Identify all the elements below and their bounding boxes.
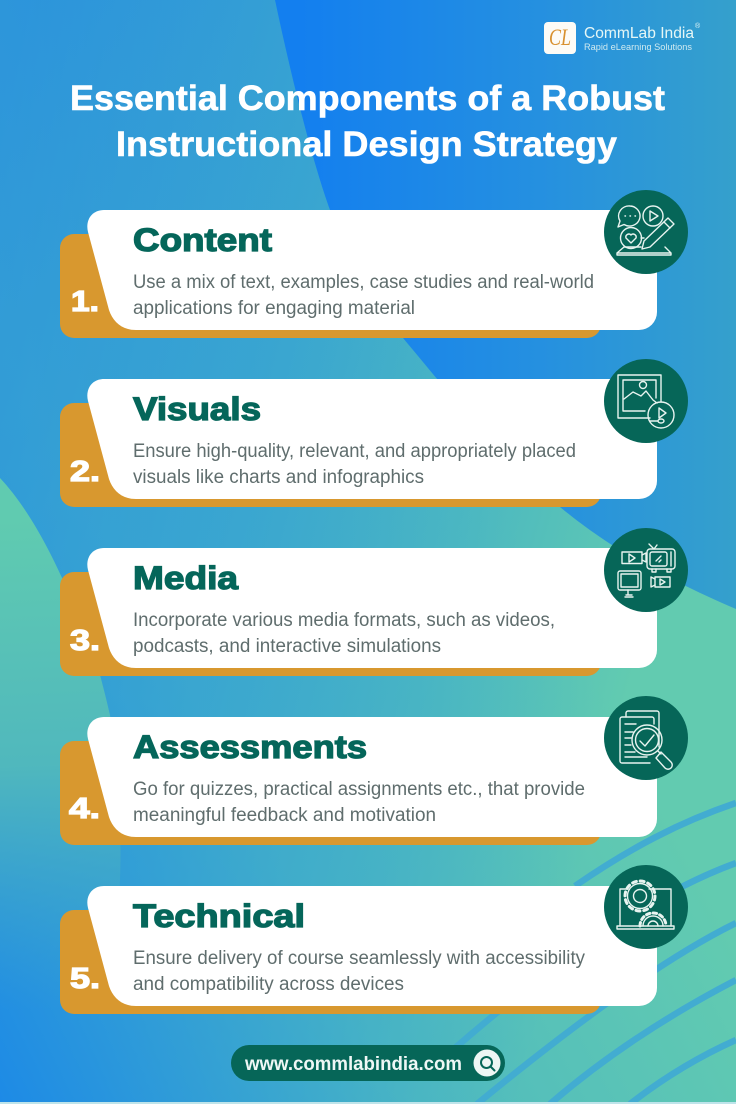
number tab 5: 5. xyxy=(70,963,100,995)
card 2: Visuals xyxy=(60,359,688,507)
logo: CommLab India xyxy=(544,22,701,54)
heading: Media: Media xyxy=(133,560,238,596)
card 1: Content xyxy=(60,190,688,338)
footer: website pill: www.commlabindia.com xyxy=(244,1054,462,1075)
white panel 5 xyxy=(87,886,657,1006)
description 5: and compatibility across devices xyxy=(133,974,404,995)
icon: content creation xyxy=(604,190,688,274)
logo: CommLab India: Rapid eLearning Solutions xyxy=(584,42,692,53)
number tab 3: 3. xyxy=(70,625,100,657)
white panel 1 xyxy=(87,210,657,330)
description 4 xyxy=(133,779,585,826)
description 3: Incorporate various media formats, such as videos, xyxy=(133,610,555,631)
description 4: Go for quizzes, practical assignments etc., that provide xyxy=(133,779,585,800)
logo: CommLab India: CommLab India xyxy=(584,25,694,42)
number tab 3 xyxy=(60,572,601,676)
description 4: meaningful feedback and motivation xyxy=(133,805,436,826)
heading: Technical: Technical xyxy=(133,898,305,934)
description 2: Ensure high-quality, relevant, and appropriately placed xyxy=(133,441,576,462)
title: Essential Components of a Robust xyxy=(70,79,665,118)
logo: CommLab India: CL xyxy=(549,25,571,50)
card 4: Assessments xyxy=(60,696,688,845)
description 1: Use a mix of text, examples, case studies and real-world xyxy=(133,272,594,293)
title xyxy=(70,79,665,164)
number tab 1 xyxy=(60,234,601,338)
number tab 4 xyxy=(60,741,601,845)
card 3: Media xyxy=(60,528,688,676)
footer: website pill xyxy=(231,1045,505,1081)
heading: Content: Content xyxy=(133,222,272,258)
description 2: visuals like charts and infographics xyxy=(133,467,424,488)
white panel 3 xyxy=(87,548,657,668)
icon: image and video xyxy=(604,359,688,443)
heading: Visuals: Visuals xyxy=(133,391,261,427)
icon: quiz document under magnifier xyxy=(604,696,688,780)
number tab 2 xyxy=(60,403,601,507)
number tab 1: 1. xyxy=(71,286,99,318)
description 2 xyxy=(133,441,576,488)
description 5: Ensure delivery of course seamlessly with accessibility xyxy=(133,948,585,969)
heading: Assessments: Assessments xyxy=(133,729,367,765)
title: Instructional Design Strategy xyxy=(116,125,618,164)
description 1 xyxy=(133,272,594,319)
logo: CommLab India: ® xyxy=(695,22,701,30)
number tab 5 xyxy=(60,910,601,1014)
icon: laptop with gears xyxy=(604,865,688,949)
description 3: podcasts, and interactive simulations xyxy=(133,636,441,657)
white panel 4 xyxy=(87,717,657,837)
description 1: applications for engaging material xyxy=(133,298,415,319)
description 5 xyxy=(133,948,585,995)
white panel 2 xyxy=(87,379,657,499)
description 3 xyxy=(133,610,555,657)
number tab 2: 2. xyxy=(70,456,100,488)
icon: media devices xyxy=(604,528,688,612)
card 5: Technical xyxy=(60,865,688,1014)
icon: search xyxy=(474,1050,500,1076)
number tab 4: 4. xyxy=(69,793,100,825)
